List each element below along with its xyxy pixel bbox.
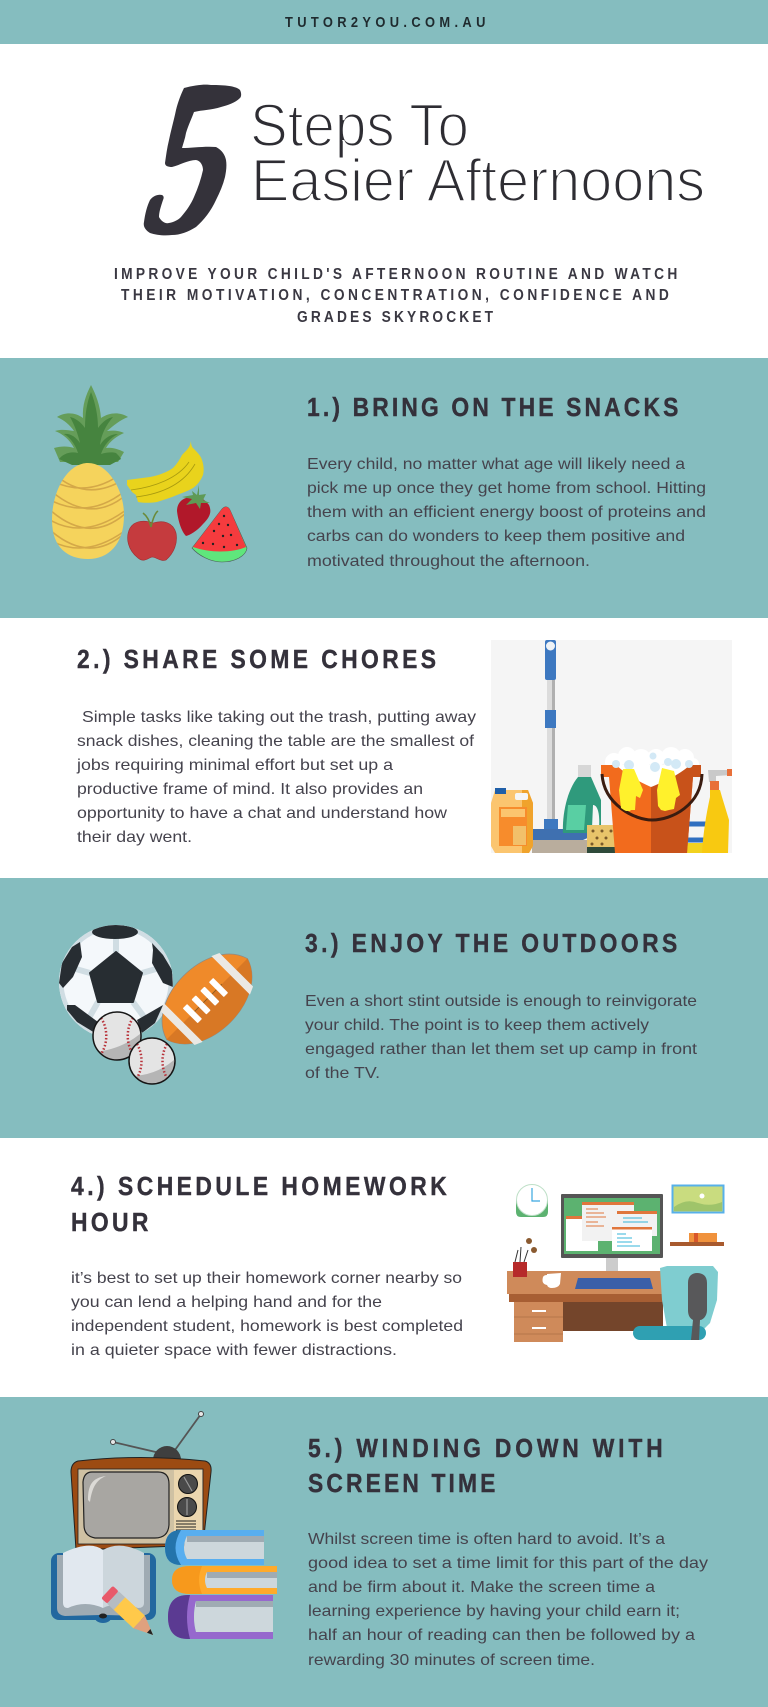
- heading: step 2: 2.) SHARE SOME CHORES: [77, 646, 436, 674]
- television: [71, 1412, 211, 1550]
- icon: fruit group: [50, 385, 247, 562]
- clock: [516, 1184, 548, 1217]
- body: step 1: carbs can do wonders to keep them positive and: [307, 528, 685, 545]
- title block: [114, 85, 705, 326]
- sponge: [587, 825, 615, 853]
- subtitle: [114, 265, 677, 326]
- body: step 3: engaged rather than let them set up camp in front: [305, 1041, 698, 1058]
- body: step 1: Every child, no matter what age will likely need a: [307, 456, 685, 473]
- body: step 2: jobs requiring minimal effort but set up a: [76, 757, 393, 774]
- body: step 2: Simple tasks like taking out the trash, putting away: [82, 709, 476, 726]
- panel: step 5 screen time: [0, 1397, 768, 1707]
- heading: step 1: 1.) BRING ON THE SNACKS: [307, 394, 678, 422]
- keyboard: [575, 1278, 653, 1289]
- heading: step 4: [71, 1173, 447, 1237]
- monitor: [561, 1194, 663, 1275]
- body: step 3: your child. The point is to keep them actively: [305, 1017, 649, 1034]
- heading: step 5: [308, 1435, 663, 1498]
- subtitle: IMPROVE YOUR CHILD'S AFTERNOON ROUTINE AND WATCH: [114, 265, 677, 283]
- heading: step 3: 3.) ENJOY THE OUTDOORS: [305, 930, 677, 958]
- body: step 5: half an hour of reading can then be followed by a: [308, 1627, 695, 1644]
- body: step 2: productive frame of mind. It also provides an: [77, 781, 423, 798]
- body: step 3: Even a short stint outside is enough to reinvigorate: [305, 993, 697, 1010]
- heading: step 4: HOUR: [71, 1209, 149, 1237]
- body: step 4: independent student, homework is best completed: [71, 1318, 463, 1335]
- panel: step 4 homework: [0, 1138, 768, 1397]
- chair: [633, 1266, 718, 1340]
- body: step 1: them with an efficient energy boost of proteins and: [307, 504, 706, 521]
- gloves: [619, 768, 680, 811]
- mop: [532, 640, 592, 853]
- scrubbing brush: [687, 822, 706, 853]
- body: step 4: in a quieter space with fewer distractions.: [71, 1342, 397, 1359]
- body: step 4: it’s best to set up their homework corner nearby so: [71, 1270, 462, 1287]
- panel: step 1 snacks: [0, 358, 768, 618]
- body: step 1: motivated throughout the afternoon.: [307, 553, 590, 570]
- soap foam: [605, 747, 699, 765]
- body: step 2: opportunity to have a chat and understand how: [77, 805, 447, 822]
- subtitle: GRADES SKYROCKET: [297, 308, 493, 326]
- soccer ball: [59, 925, 173, 1039]
- bucket: [601, 752, 702, 853]
- american football: [143, 935, 271, 1063]
- baseball two: [129, 1038, 176, 1086]
- body: step 3: of the TV.: [305, 1065, 380, 1082]
- body: step 4: you can lend a helping hand and for the: [71, 1294, 382, 1311]
- icon: sports balls: [59, 925, 271, 1086]
- icon: tv and books: [51, 1412, 277, 1641]
- subtitle: THEIR MOTIVATION, CONCENTRATION, CONFIDENCE AND: [121, 286, 669, 304]
- icon: desk and computer: [507, 1184, 724, 1342]
- pencil: [101, 1586, 159, 1641]
- heading: step 4: 4.) SCHEDULE HOMEWORK: [71, 1173, 447, 1201]
- panel: step 2 chores: [76, 640, 732, 853]
- desk: [507, 1271, 663, 1342]
- body: step 1: pick me up once they get home from school. Hitting: [307, 480, 706, 497]
- title text: Steps To: [250, 92, 469, 159]
- body: step 5: learning experience by having your child earn it;: [308, 1603, 680, 1620]
- body: step 2: their day went.: [77, 829, 192, 846]
- body: step 2: [76, 709, 476, 846]
- big brush numeral 5: [144, 85, 241, 235]
- body: step 5: good idea to set a time limit for this part of the day: [308, 1555, 708, 1572]
- body: step 5: [308, 1531, 708, 1669]
- header band: [0, 0, 768, 44]
- title text: Easier Afternoons: [251, 147, 705, 214]
- body: step 5: Whilst screen time is often hard to avoid. It’s a: [308, 1531, 665, 1548]
- shelf: [670, 1233, 724, 1246]
- baseball one: [93, 1012, 142, 1062]
- spray bottle: [702, 769, 733, 853]
- body: step 4: [71, 1270, 463, 1359]
- picture: [672, 1186, 724, 1212]
- title text: [250, 92, 705, 214]
- book stack: [165, 1530, 277, 1639]
- panel: step 3 outdoors: [0, 878, 768, 1138]
- jug: [491, 788, 533, 853]
- heading: step 5: 5.) WINDING DOWN WITH: [308, 1435, 663, 1463]
- pen holder: [513, 1238, 537, 1277]
- body: step 5: and be firm about it. Make the screen time a: [308, 1579, 655, 1596]
- body: step 3: [305, 993, 698, 1082]
- open book: [51, 1546, 156, 1623]
- green bottle: [563, 765, 601, 833]
- header band: TUTOR2YOU.COM.AU: [285, 13, 485, 30]
- icon: cleaning supplies: [491, 640, 733, 853]
- body: step 1: [307, 456, 706, 570]
- mug: [542, 1273, 561, 1288]
- body: step 5: rewarding 30 minutes of screen time.: [308, 1652, 595, 1669]
- body: step 2: snack dishes, cleaning the table are the smallest of: [77, 733, 475, 750]
- heading: step 5: SCREEN TIME: [308, 1470, 495, 1498]
